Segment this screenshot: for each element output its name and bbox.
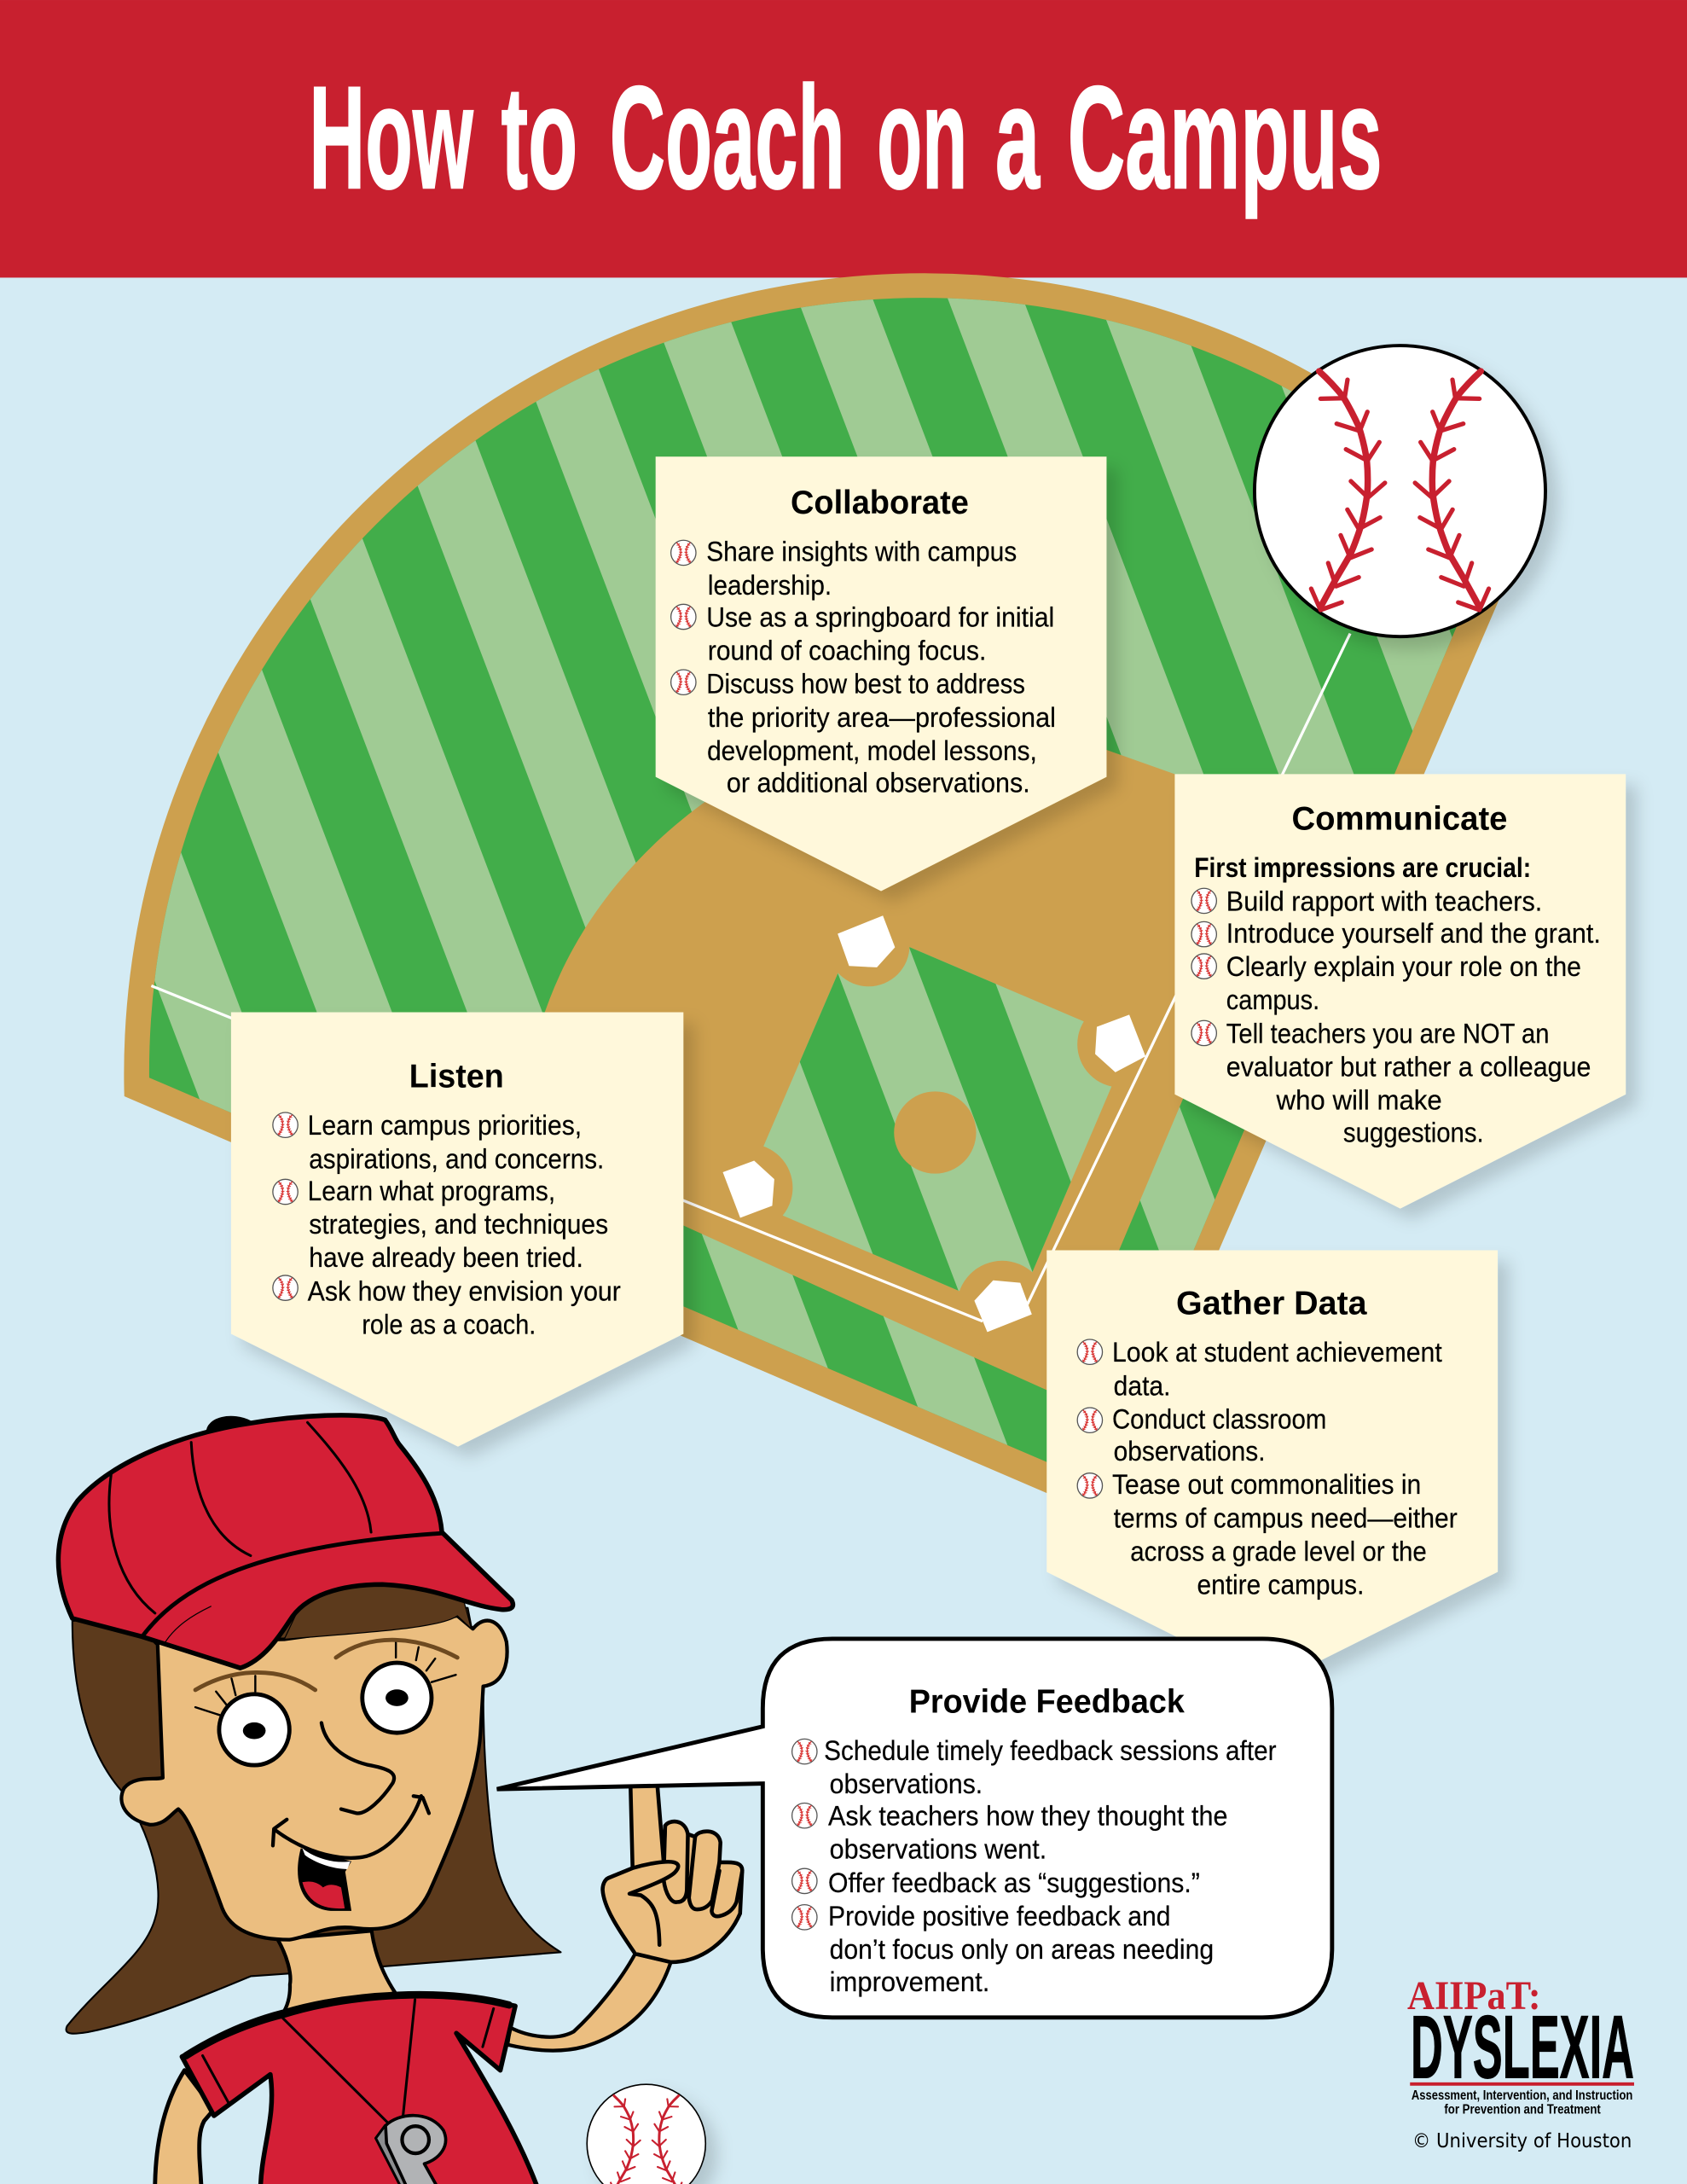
text block: communicate list: evaluator but rather a colleague [1226,1051,1591,1083]
logo: AIIPaT Dyslexia: for Prevention and Treatment [1444,2102,1601,2117]
text block: listen list: Learn campus priorities, [308,1109,582,1141]
logo: AIIPaT Dyslexia [1407,1974,1634,2152]
title: Campus [1068,56,1383,219]
base dirt circles and pitcher's mound [705,904,1163,1351]
text block: listen list: aspirations, and concerns. [309,1142,604,1174]
infield dirt [529,737,1225,1395]
text block: collaborate list: Use as a springboard for initial [706,601,1054,632]
heading: listen: Listen [409,1059,504,1095]
text block: collaborate list: or additional observations. [727,767,1030,799]
text block: feedback list: observations. [830,1768,983,1799]
text block: gather data list: terms of campus need—either [1114,1502,1458,1533]
outfield stripes [148,298,1457,1462]
cap [58,1415,513,1668]
smile [273,1796,429,1858]
text block: feedback list: improvement. [830,1966,989,1997]
text block: gather data list: data. [1114,1369,1171,1401]
subheading: First impressions are crucial: [1194,851,1531,883]
text block: feedback list: observations went. [830,1833,1046,1865]
text block: gather data list: entire campus. [1197,1569,1364,1600]
logo: AIIPaT Dyslexia: AIIPaT: [1407,1974,1541,2018]
text block: gather data list [1112,1336,1458,1600]
panel: listen [231,1012,683,1447]
hair [67,1589,560,2034]
nose [322,1722,394,1813]
text block: collaborate list: Discuss how best to address [706,668,1025,700]
icon: large baseball [1255,346,1545,636]
mouth [298,1848,351,1911]
bullets [1191,888,1216,1046]
header banner [0,0,1687,277]
title: a [995,56,1041,219]
text block: feedback list [824,1734,1277,1997]
title: to [501,56,577,219]
shirt collar [186,1995,509,2056]
bangs [284,1577,472,1640]
title: How [309,56,473,219]
text block: listen list [308,1109,621,1339]
text block: collaborate list: round of coaching focus. [708,635,986,666]
shirt seams [203,2000,494,2126]
bullets [792,1739,817,1930]
text block: gather data list: Conduct classroom [1112,1403,1326,1434]
text block: communicate list: Clearly explain your role on the [1226,950,1581,982]
text block: communicate list: Tell teachers you are NOT an [1226,1017,1549,1048]
text block: collaborate list: Share insights with campus [706,536,1017,567]
text block: communicate list: campus. [1226,984,1319,1015]
whistle [376,2116,446,2184]
text block: listen list: have already been tried. [309,1241,583,1273]
text block: gather data list: Look at student achievement [1112,1336,1442,1368]
bullets [671,540,696,694]
infield grass [763,947,1112,1292]
logo: AIIPaT Dyslexia: Assessment, Intervention, and Instruction [1412,2088,1632,2103]
text block: listen list: Learn what programs, [308,1175,555,1206]
eyebrows [195,1640,457,1690]
text block: feedback list: Provide positive feedback and [828,1900,1171,1931]
text block: listen list: strategies, and techniques [309,1208,608,1240]
text block: feedback list: don’t focus only on areas needing [830,1933,1214,1965]
copyright: © University of Houston [1412,2130,1632,2152]
panel: communicate [1174,774,1626,1209]
title [309,56,1383,219]
bullets [1077,1339,1103,1498]
heading: provide feedback: Provide Feedback [909,1683,1185,1720]
text block: gather data list: Tease out commonalities in [1112,1468,1421,1500]
text block: gather data list: across a grade level or the [1130,1535,1427,1566]
text block: collaborate list: development, model lessons, [707,735,1037,766]
bullets [273,1112,298,1300]
panel: provide feedback speech bubble [497,1639,1332,2018]
text block: gather data list: observations. [1114,1435,1266,1467]
right arm [507,1954,671,2051]
text block: communicate list: who will make [1276,1084,1442,1116]
left arm [155,2071,214,2184]
heading: communicate: Communicate [1292,801,1507,838]
face [121,1616,507,1940]
text block: feedback list: Offer feedback as “suggestions.” [828,1867,1200,1898]
bases [723,915,1145,1332]
character: coach [58,1415,742,2184]
title: on [877,56,967,219]
text block: collaborate list: leadership. [708,569,832,601]
text block: feedback list: Ask teachers how they thought the [828,1800,1227,1832]
shirt [182,1996,538,2184]
title: Coach [610,56,845,219]
text block: listen list: role as a coach. [362,1308,536,1339]
text block: collaborate list [706,536,1056,799]
foul lines [151,634,1350,1321]
heading: collaborate: Collaborate [791,485,969,521]
panel: collaborate [656,456,1106,892]
baseball field [124,273,1499,1493]
heading: gather data: Gather Data [1176,1286,1368,1322]
text block: listen list: Ask how they envision your [308,1275,621,1306]
text block: communicate list: suggestions. [1343,1116,1484,1147]
field border [124,273,1523,1518]
neck [277,1931,396,2013]
text block: collaborate list: the priority area—professional [708,701,1056,733]
text block: communicate list: Introduce yourself and the grant. [1226,917,1601,949]
text block: communicate list: Build rapport with teachers. [1226,885,1542,916]
icon: small baseball [587,2084,705,2184]
hand [603,1786,742,1962]
panel: gather data [1046,1251,1498,1685]
text block: communicate list [1226,885,1601,1147]
text block: feedback list: Schedule timely feedback sessions after [824,1734,1277,1766]
eyes [195,1642,455,1765]
